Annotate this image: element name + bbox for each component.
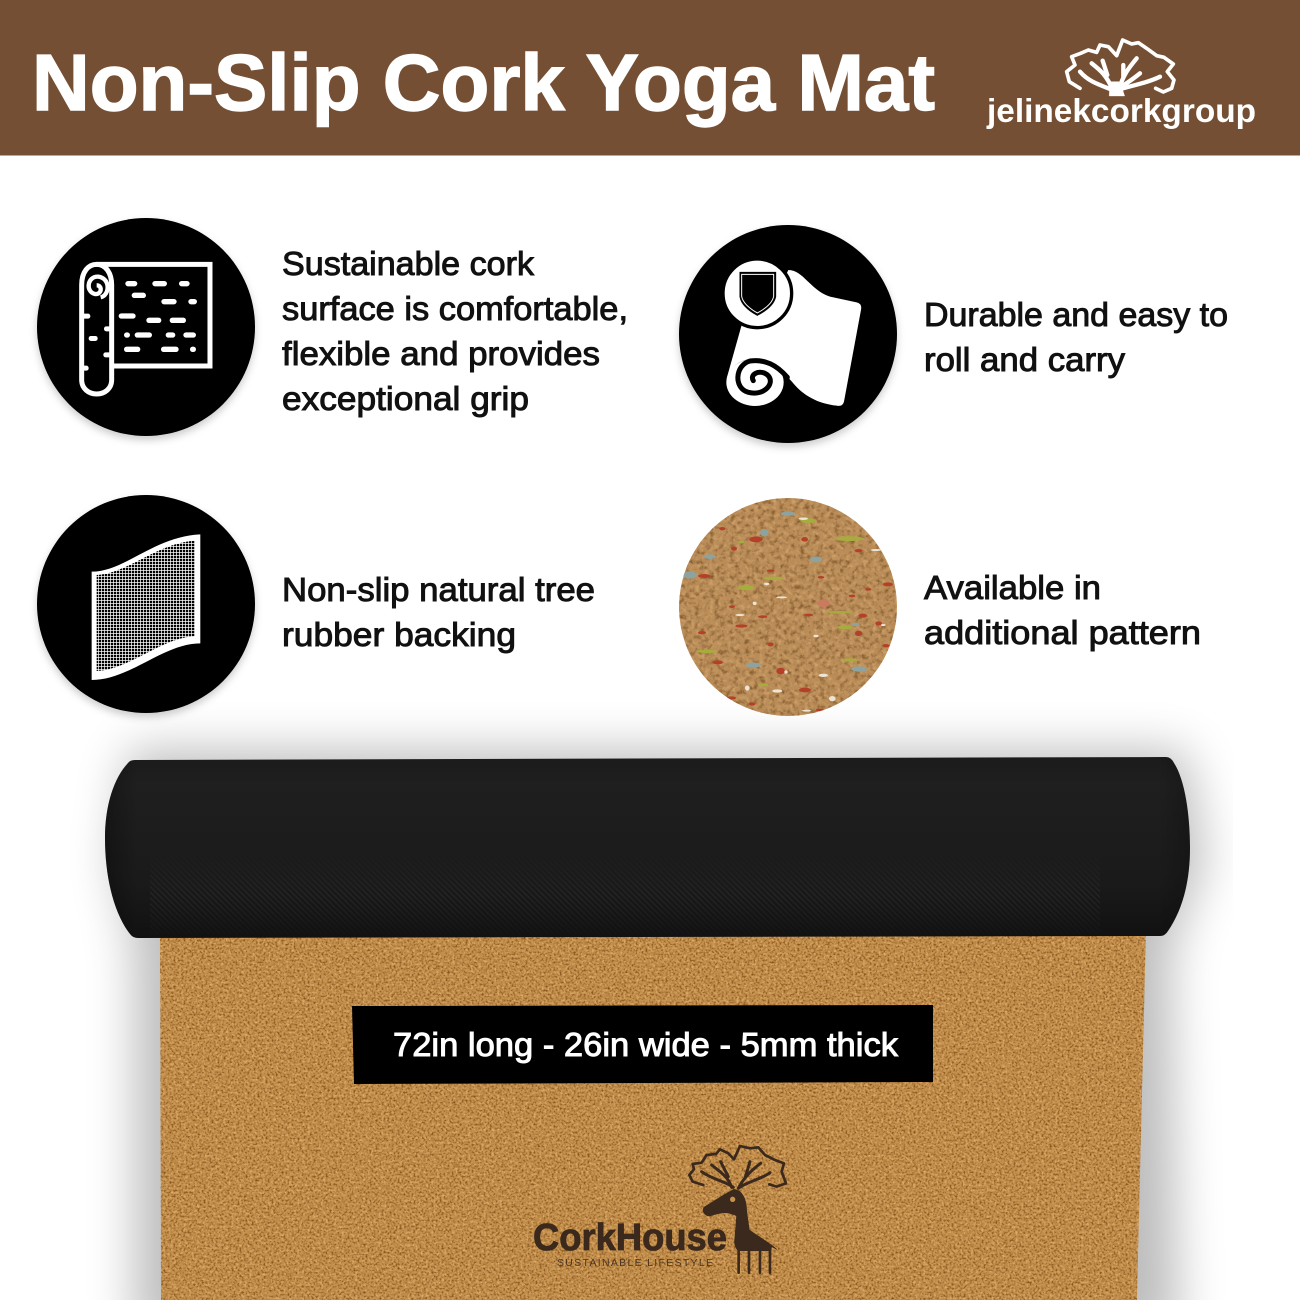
black rubber roll: [105, 757, 1190, 938]
logo: CorkHouse deer: CorkHouse: [533, 1217, 727, 1259]
feature: additional pattern: [679, 498, 1201, 716]
feature: sustainable cork surface: [37, 218, 628, 436]
text: additional pattern: Available in: [924, 569, 1101, 606]
text: additional pattern: additional pattern: [924, 614, 1201, 651]
text: sustainable cork surface: Sustainable cork: [282, 245, 535, 282]
icon: rolled mat with shield: [679, 225, 897, 443]
cork mat sheet: [160, 930, 1146, 1300]
logo: CorkHouse deer: [533, 1146, 786, 1273]
logo: jelinekcorkgroup: jelinekcorkgroup: [986, 92, 1256, 129]
icon: rolled mat with cork surface: [37, 218, 255, 436]
text: durable and easy to roll: roll and carry: [924, 341, 1126, 378]
text: sustainable cork surface: surface is comfortable,: [282, 290, 628, 327]
logo: CorkHouse deer: SUSTAINABLE LIFESTYLE: [557, 1257, 713, 1269]
mat shadow: [115, 750, 1205, 1300]
yoga mat photo: [105, 750, 1205, 1300]
feature: non-slip rubber backing: [37, 495, 595, 713]
text: non-slip rubber backing: Non-slip natural tree: [282, 571, 595, 608]
logo: jelinekcorkgroup: [986, 40, 1256, 129]
text: non-slip rubber backing: rubber backing: [282, 616, 516, 653]
dimensions label: [352, 1005, 933, 1084]
header banner: [0, 0, 1300, 156]
icon: mesh rubber sheet: [37, 495, 255, 713]
text: additional pattern: [924, 569, 1201, 651]
title: Non-Slip Cork Yoga Mat: [32, 38, 935, 127]
text: durable and easy to roll: [924, 296, 1228, 378]
swatch: multicolour cork pattern: [679, 498, 897, 716]
text: durable and easy to roll: Durable and easy to: [924, 296, 1228, 333]
text: sustainable cork surface: [282, 245, 628, 417]
text: non-slip rubber backing: [282, 571, 595, 653]
feature: durable and easy to roll: [679, 225, 1228, 443]
text: sustainable cork surface: exceptional grip: [282, 380, 529, 417]
text: sustainable cork surface: flexible and provides: [282, 335, 600, 372]
dimensions label: 72in long - 26in wide - 5mm thick: [393, 1026, 899, 1063]
